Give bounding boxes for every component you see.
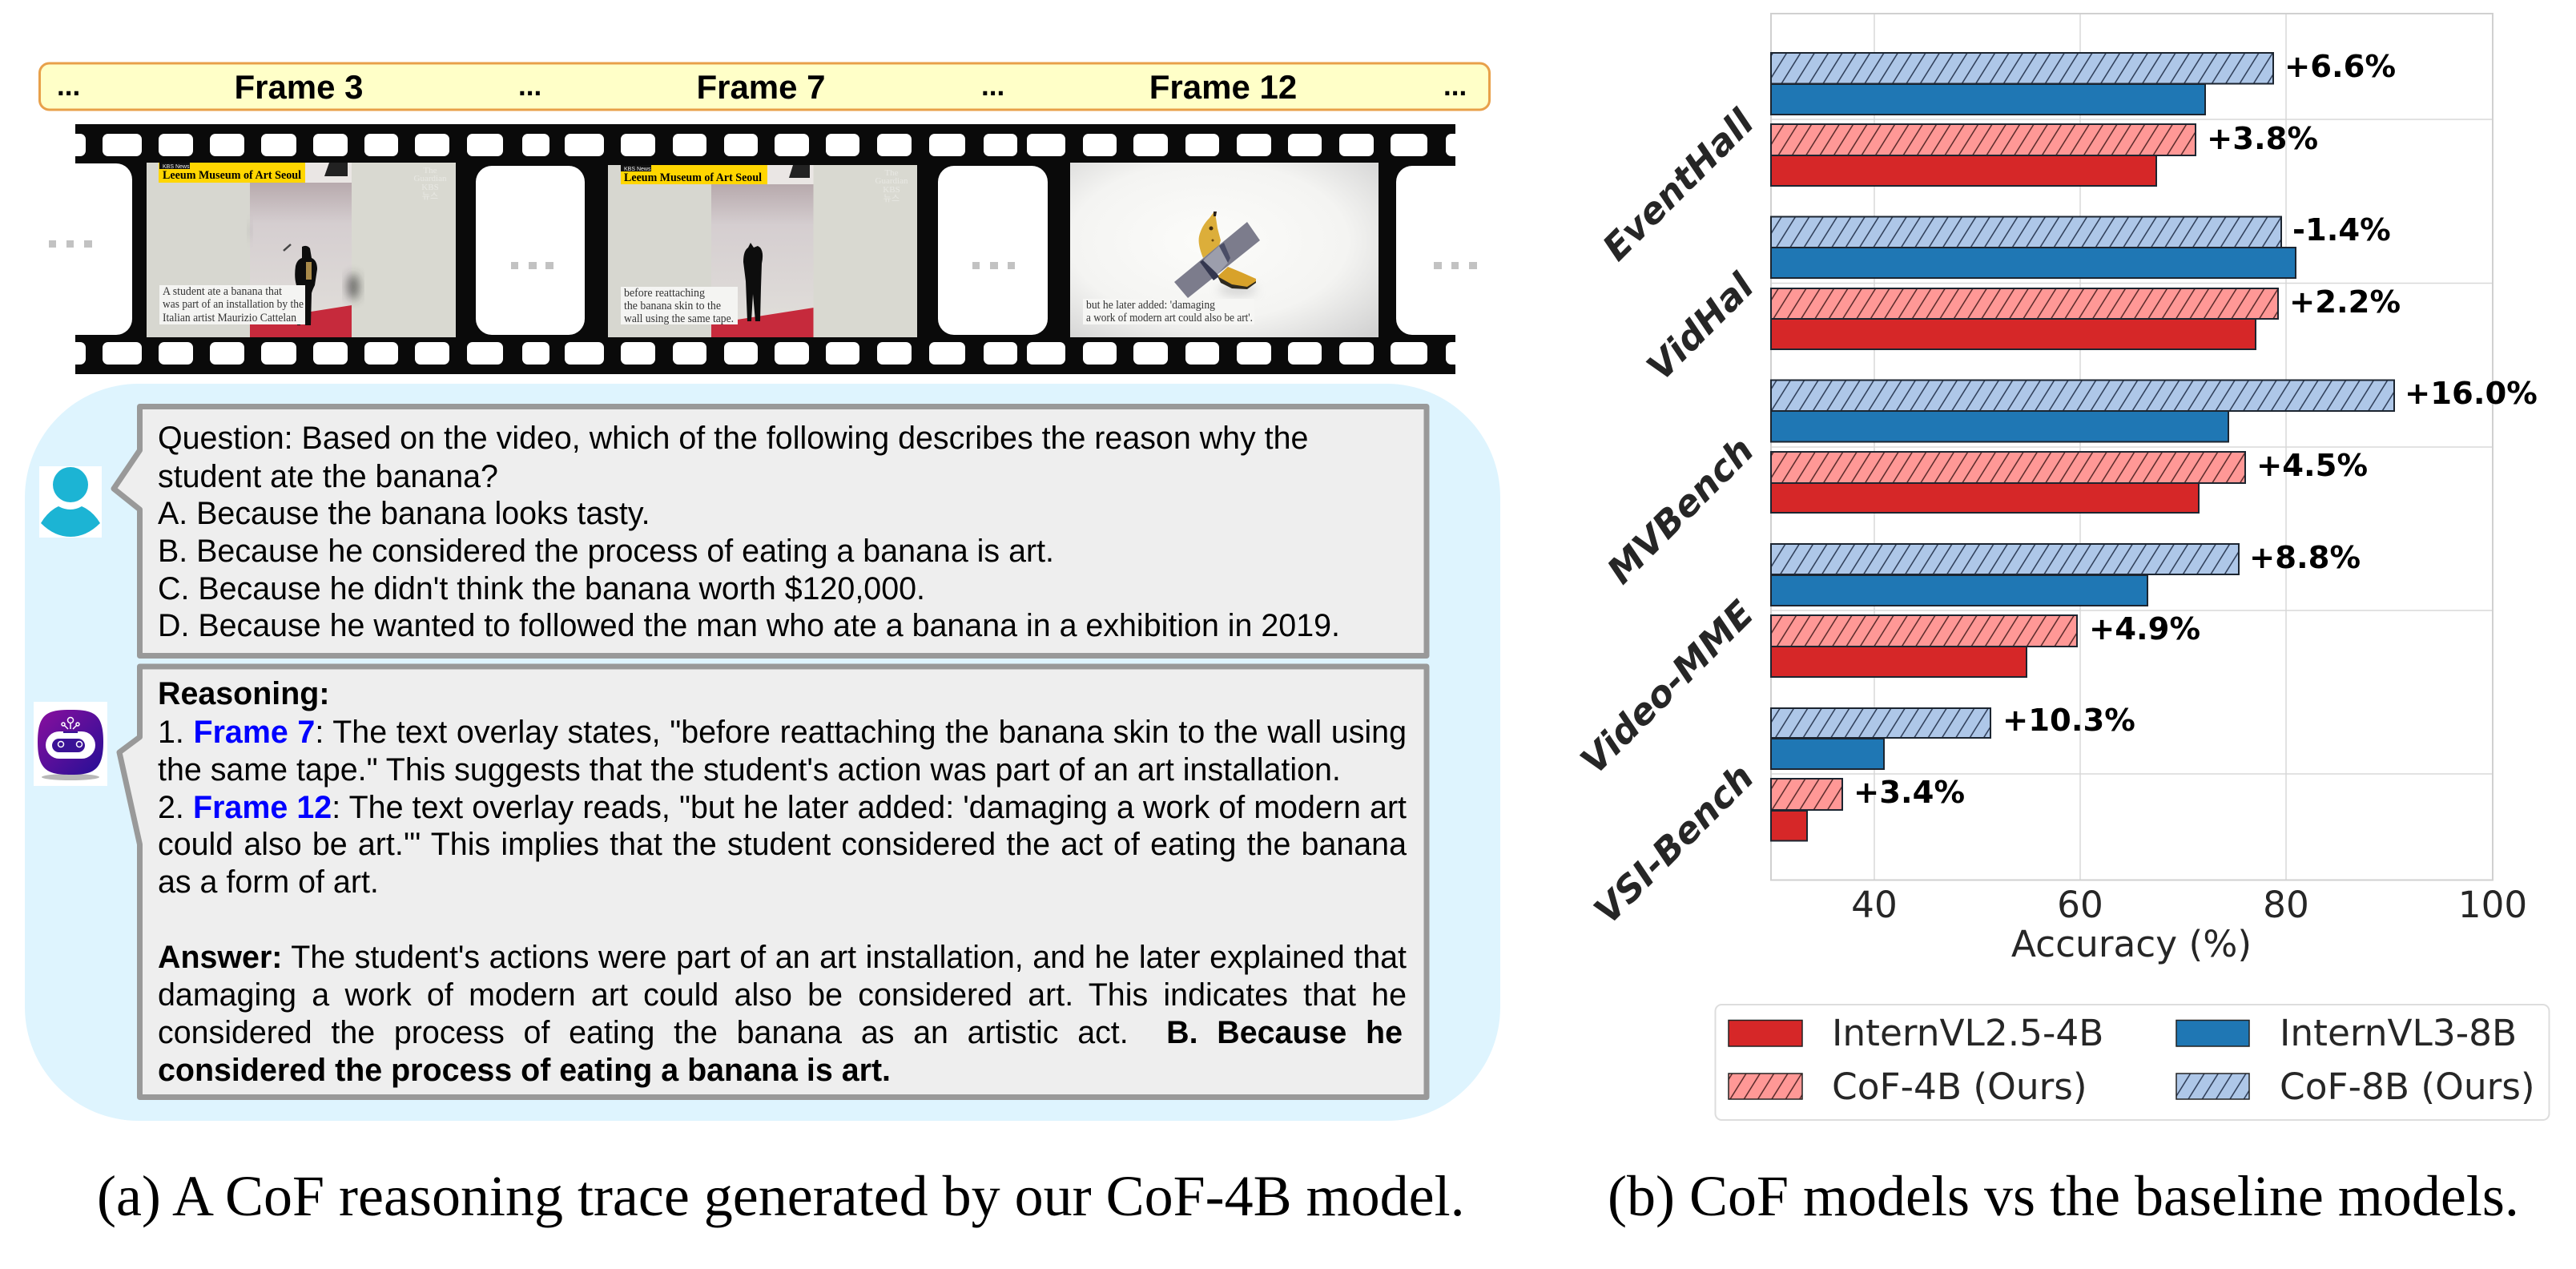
legend xyxy=(1716,1005,2549,1120)
reasoning and answer text: 2. Frame 12: The text overlay reads, "but he later added: 'damaging a work of modern art xyxy=(158,790,1407,825)
caption (b): (b) CoF models vs the baseline models. xyxy=(1608,1164,2519,1228)
yellow banner xyxy=(159,163,305,183)
video frame 3 xyxy=(147,163,456,337)
frame header bar xyxy=(40,63,1490,110)
question text: B. Because he considered the process of eating a banana is art. xyxy=(158,534,1054,569)
frame caption xyxy=(159,285,305,324)
legend item: InternVL3-8B: InternVL3-8B xyxy=(2280,1012,2517,1054)
value labels: +3.4% xyxy=(1854,775,1965,811)
group: MVBench bars xyxy=(1771,380,2394,513)
reasoning and answer text: considered the process of eating the banana as an artistic act. B. Because he xyxy=(158,1015,1403,1050)
ellipsis: ... xyxy=(1443,70,1467,102)
video frame 12 xyxy=(1070,163,1379,337)
video frame 7: Leeum Museum of Art Seoul xyxy=(624,171,762,184)
value labels: +16.0% xyxy=(2405,376,2538,412)
ellipsis: ... xyxy=(981,70,1004,102)
question text xyxy=(158,421,1340,643)
value labels: -1.4% xyxy=(2292,212,2391,248)
value labels: +8.8% xyxy=(2249,540,2361,576)
reasoning speech bubble xyxy=(119,667,1427,1098)
value labels: +4.9% xyxy=(2089,611,2200,647)
group: Video-MME bars xyxy=(1771,544,2239,677)
person xyxy=(295,246,317,325)
reasoning and answer text: the same tape." This suggests that the student's action was part of an art installation. xyxy=(158,752,1341,788)
y-axis category labels xyxy=(1572,101,1762,932)
question speech bubble xyxy=(114,407,1427,655)
video frame 7 xyxy=(608,165,918,337)
watermark: Guardian xyxy=(414,174,447,183)
watermark: KBS xyxy=(883,185,900,195)
y-axis category labels: MVBench xyxy=(1599,429,1762,592)
frame caption xyxy=(1083,299,1254,324)
icon: robot assistant xyxy=(34,702,107,786)
legend item: CoF-8B (Ours): CoF-8B (Ours) xyxy=(2280,1066,2535,1108)
value labels: +3.8% xyxy=(2207,121,2318,157)
video frame 3: A student ate a banana that xyxy=(163,285,282,298)
legend item: InternVL2.5-4B: InternVL2.5-4B xyxy=(1832,1012,2103,1054)
label: Frame 12: Frame 12 xyxy=(1149,68,1297,106)
legend item: CoF-4B (Ours): CoF-4B (Ours) xyxy=(1832,1066,2087,1108)
question text: student ate the banana? xyxy=(158,459,498,494)
value labels xyxy=(1854,49,2538,811)
reasoning and answer text: considered the process of eating a banana is art. xyxy=(158,1053,891,1088)
y-axis category labels: Video-MME xyxy=(1572,592,1762,782)
video frame 12: but he later added: 'damaging xyxy=(1086,299,1215,312)
watermark: 뉴스 xyxy=(422,191,438,201)
watermark: 뉴스 xyxy=(883,193,900,203)
y-axis category labels: VidHal xyxy=(1639,264,1762,389)
label: Frame 3: Frame 3 xyxy=(234,68,364,106)
label: Frame 7: Frame 7 xyxy=(696,68,826,106)
caption (a): (a) A CoF reasoning trace generated by our CoF-4B model. xyxy=(97,1164,1465,1228)
watermark: KBS xyxy=(421,183,439,192)
watermark: The xyxy=(423,166,437,175)
video frame 3: KBS News xyxy=(163,164,190,170)
x-axis title: Accuracy (%) xyxy=(2011,923,2252,965)
reasoning and answer text: 1. Frame 7: The text overlay states, "before reattaching the banana skin to the wall using xyxy=(158,715,1407,750)
group: VidHal bars xyxy=(1771,216,2296,349)
video frame 3: was part of an installation by the xyxy=(163,298,304,311)
watermark: Guardian xyxy=(875,176,908,186)
video frame 3: Leeum Museum of Art Seoul xyxy=(163,169,301,182)
x-axis tick labels: 80 xyxy=(2263,884,2309,926)
legend item: InternVL3-8B xyxy=(2176,1012,2517,1054)
value labels: +10.3% xyxy=(2002,703,2135,739)
video frame 12: a work of modern art could also be art'. xyxy=(1086,312,1253,324)
y-axis category labels: VSI-Bench xyxy=(1586,755,1762,932)
film strip xyxy=(40,124,1492,374)
question text: D. Because he wanted to followed the man who ate a banana in a exhibition in 2019. xyxy=(158,608,1340,643)
person xyxy=(743,243,763,321)
video frame 7: wall using the same tape. xyxy=(624,312,734,325)
value labels: +4.5% xyxy=(2256,448,2368,484)
question text: C. Because he didn't think the banana worth $120,000. xyxy=(158,571,925,606)
y-axis category labels: EventHall xyxy=(1594,101,1762,269)
value labels: +6.6% xyxy=(2284,49,2396,85)
reasoning and answer text: could also be art.'" This implies that the student considered the act of eating the banana xyxy=(158,827,1407,862)
yellow banner xyxy=(621,165,767,184)
video frame 7: before reattaching xyxy=(624,287,705,300)
frame caption xyxy=(621,287,738,324)
group: VSI-Bench bars xyxy=(1771,708,1990,841)
video frame 7: the banana skin to the xyxy=(624,300,721,312)
duct tape xyxy=(1174,222,1260,298)
watermark xyxy=(875,170,908,202)
reasoning and answer text xyxy=(158,676,1407,1088)
value labels: +2.2% xyxy=(2289,284,2401,320)
panel: conversation background xyxy=(25,384,1500,1121)
watermark xyxy=(414,167,446,200)
ellipsis: ... xyxy=(57,70,80,102)
question text: A. Because the banana looks tasty. xyxy=(158,496,650,531)
reasoning and answer text: as a form of art. xyxy=(158,864,379,900)
grey ellipsis dots xyxy=(49,240,1477,269)
reasoning and answer text: Reasoning: xyxy=(158,676,329,711)
reasoning and answer text: damaging a work of modern art could also be considered art. This indicates that he xyxy=(158,977,1407,1013)
bar chart xyxy=(1572,14,2538,965)
icon: user xyxy=(39,466,102,538)
video frame 3: Italian artist Maurizio Cattelan xyxy=(163,312,297,324)
x-axis tick labels: 100 xyxy=(2458,884,2527,926)
reasoning and answer text: Answer: The student's actions were part of an art installation, and he later explained that xyxy=(158,940,1407,975)
chart axes and grid xyxy=(1771,14,2493,880)
ellipsis: ... xyxy=(518,70,541,102)
x-axis tick labels xyxy=(1851,884,2527,926)
watermark: The xyxy=(884,168,899,178)
group: EventHall bars xyxy=(1771,53,2273,186)
video frame 7: KBS News xyxy=(624,167,651,172)
x-axis tick labels: 40 xyxy=(1851,884,1898,926)
question text: Question: Based on the video, which of the following describes the reason why the xyxy=(158,421,1308,456)
banana xyxy=(1199,212,1221,258)
x-axis tick labels: 60 xyxy=(2057,884,2103,926)
